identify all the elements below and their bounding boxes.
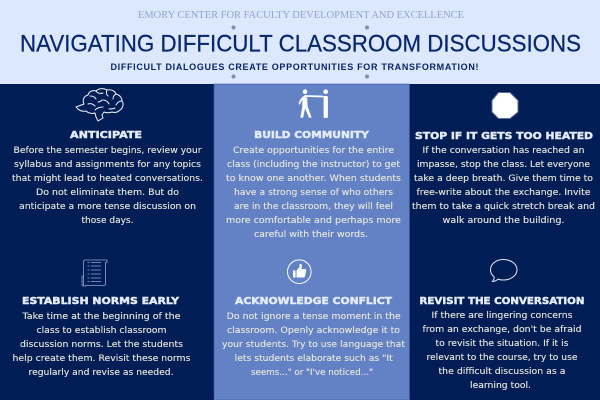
text block: free-write about the exchange. Invite	[416, 188, 591, 198]
text block: to revisit the situation. If it is	[436, 339, 569, 349]
icon: stop octagon	[492, 92, 518, 118]
text block: from an exchange, don't be afraid	[422, 325, 582, 335]
text block: learning tool.	[470, 381, 531, 391]
text block: seems..." or "I've noticed..."	[251, 368, 373, 378]
heading: STOP IF IT GETS TOO HEATED	[415, 131, 593, 142]
text block	[12, 146, 203, 226]
panel: build community	[226, 89, 401, 240]
text block: Take time at the beginning of the	[21, 312, 181, 322]
text block: Before the semester begins, review your	[14, 146, 202, 156]
text block: the difficult discussion as a	[438, 367, 566, 377]
text block: take a deep breath. Give them time to	[414, 174, 594, 184]
heading: REVISIT THE CONVERSATION	[420, 296, 585, 307]
panel: stop if it gets too heated	[412, 92, 595, 226]
text block: relevant to the course, try to use	[426, 353, 578, 363]
panel: header band	[0, 0, 600, 84]
text block: lets students elaborate such as "It	[235, 354, 393, 364]
organisation line: EMORY CENTER FOR FACULTY DEVELOPMENT AND EXCELLENCE	[138, 10, 464, 21]
panel: establish norms early	[12, 260, 191, 378]
text block	[412, 146, 595, 226]
heading: ANTICIPATE	[70, 130, 142, 141]
text block: to know one another. When students	[226, 174, 401, 184]
heading: ACKNOWLEDGE CONFLICT	[235, 296, 393, 307]
text block: If the conversation has reached an	[422, 146, 584, 156]
text block: classroom. Openly acknowledge it to	[227, 326, 401, 336]
text block: help create them. Revisit these norms	[12, 354, 191, 364]
subtitle: DIFFICULT DIALOGUES CREATE OPPORTUNITIES FOR TRANSFORMATION!	[110, 62, 478, 72]
icon: thumbs up	[288, 260, 311, 284]
text block: Do not ignore a tense moment in the	[227, 312, 401, 322]
text block	[222, 312, 405, 378]
text block: have a strong sense of who others	[234, 188, 393, 198]
icon: two people shaking hands	[300, 89, 328, 118]
panel: acknowledge conflict	[222, 260, 405, 378]
text block: those days.	[82, 216, 134, 226]
text block: Do not eliminate them. But do	[36, 188, 180, 198]
text block: walk around the building.	[442, 216, 564, 226]
panel: anticipate	[12, 89, 203, 226]
text block: impasse, stop the class. Let everyone	[417, 160, 590, 170]
heading: BUILD COMMUNITY	[254, 130, 369, 141]
text block: class (including the instructor) to get	[227, 160, 400, 170]
selection handle dots	[232, 26, 369, 78]
text block: syllabus and assignments for any topics	[14, 160, 201, 170]
text block: your students. Try to use language that	[222, 340, 405, 350]
text block: regularly and revise as needed.	[28, 368, 174, 378]
text block: If there are lingering concerns	[432, 311, 573, 321]
heading: ESTABLISH NORMS EARLY	[22, 296, 179, 307]
text block: discussion norms. Let the students	[20, 340, 183, 350]
panel: dark background	[0, 84, 600, 400]
text block: Create opportunities for the entire	[233, 146, 394, 156]
text block	[422, 311, 582, 391]
text block: anticipate a more tense discussion on	[19, 202, 196, 212]
panel: centre column	[214, 84, 410, 400]
text block: class to establish classroom	[36, 326, 166, 336]
panel: revisit the conversation	[420, 260, 585, 391]
text block	[226, 146, 401, 240]
text block: are in the classroom, they will feel	[234, 202, 393, 212]
icon: brain	[76, 89, 123, 121]
icon: scroll document	[82, 260, 107, 286]
icon: speech bubble	[490, 260, 517, 282]
text block: careful with their words.	[254, 230, 368, 240]
text block: that might lead to heated conversations.	[12, 174, 203, 184]
text block	[12, 312, 191, 378]
text block: more comfortable and perhaps more	[226, 216, 401, 226]
text block: them to take a quick stretch break and	[412, 202, 595, 212]
